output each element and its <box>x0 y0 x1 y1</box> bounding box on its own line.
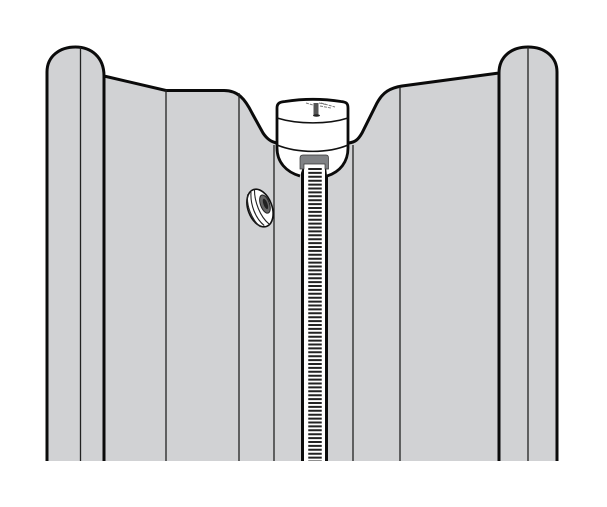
device seam lines <box>277 118 348 151</box>
panel outline <box>47 47 557 461</box>
icon: wireless sensor device <box>277 99 348 176</box>
icon: cable tie strap <box>302 164 326 461</box>
tie head buckle <box>300 155 328 169</box>
icon: round grommet <box>242 186 278 230</box>
tie teeth <box>308 168 322 461</box>
device wireless logo <box>306 103 335 117</box>
panel rib lines <box>80 47 528 461</box>
panel: corrugated metal sheet <box>47 47 557 461</box>
